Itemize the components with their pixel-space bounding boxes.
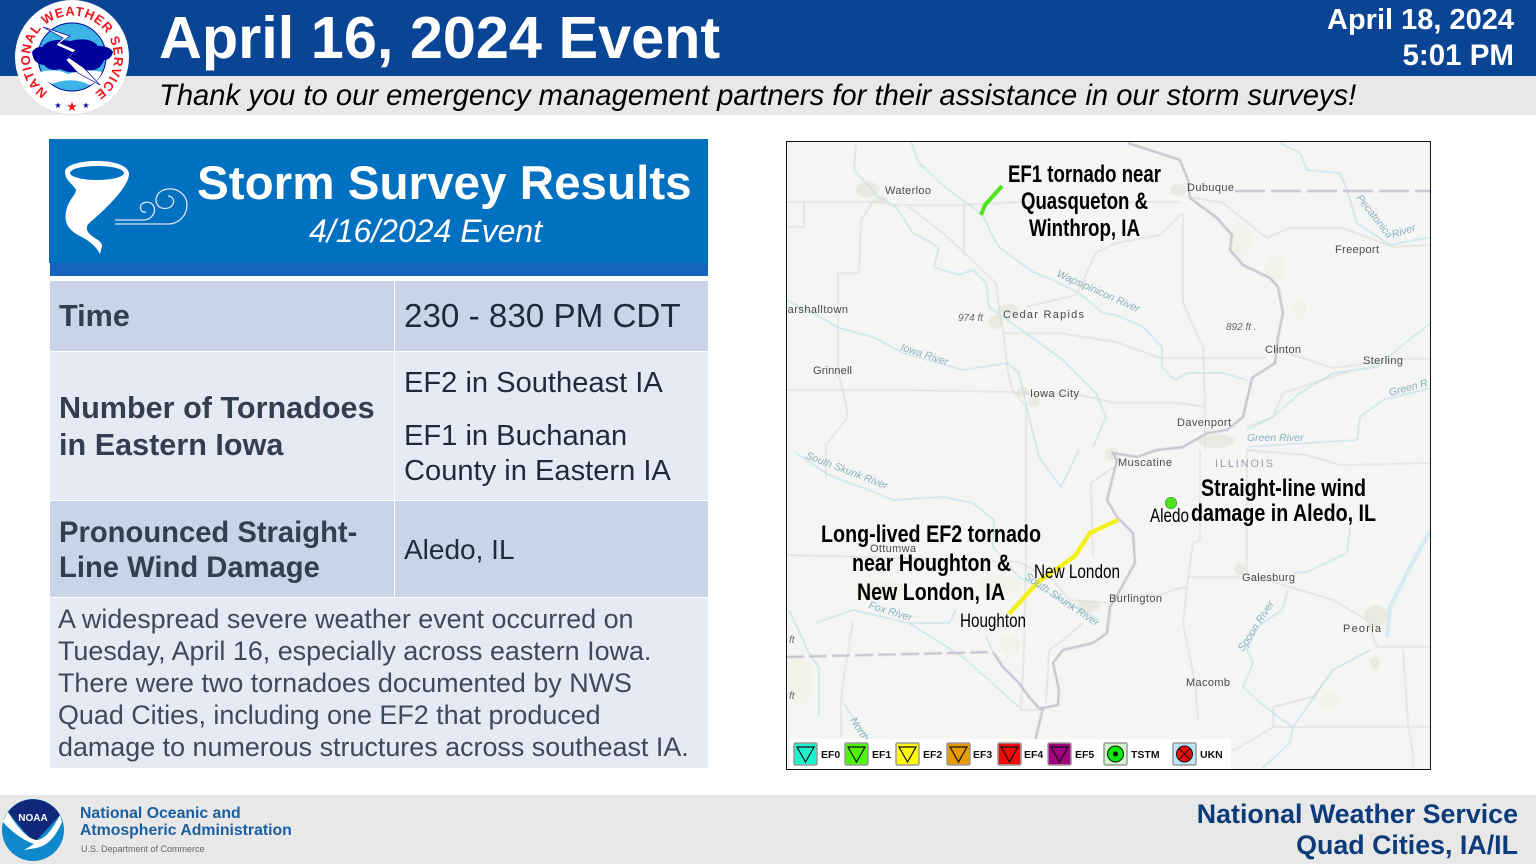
city labels: Macomb [1186,677,1230,689]
subtitle: Thank you to our emergency management partners for their assistance in our storm surveys! [159,80,1356,112]
river labels: Wapsipinicon River [1055,268,1142,315]
title: April 16, 2024 Event [159,4,720,71]
river labels: Green River [1247,432,1304,444]
date and time: April 18, 2024 [1327,4,1514,36]
callout: EF2 tornado [821,521,1041,606]
icon: National Weather Service logo: ★ [66,99,78,114]
place labels: Aledo [1150,506,1189,527]
row: straight-line wind value: Aledo, IL [404,534,515,565]
city labels [778,182,1403,702]
river labels: North [847,715,871,744]
marker: Aledo wind damage [1165,497,1177,509]
subtitle band [0,76,1536,115]
footer office name: Quad Cities, IA/IL [1296,830,1518,860]
place labels: Houghton [960,611,1026,632]
row: number of tornadoes label: in Eastern Iowa [59,428,283,462]
accent strip [50,263,708,276]
heading: storm survey results: Storm Survey Results [197,157,692,210]
legend: TSTM [1131,749,1160,761]
row: number of tornadoes value: County in Eastern IA [404,455,671,487]
city labels: 974 ft [958,313,984,324]
callout: EF2 tornado: New London, IA [857,579,1005,606]
icon: tornado and wind [65,161,188,254]
legend: EF3 [973,749,992,761]
row: time label [50,281,394,351]
footer office name: National Weather Service [1197,799,1518,829]
row: time value: 230 - 830 PM CDT [404,298,681,335]
city labels: Cedar Rapids [1003,309,1084,321]
description text: damage to numerous structures across southeast IA. [58,732,689,762]
city labels: Iowa City [1030,388,1080,400]
city labels: Muscatine [1118,457,1172,469]
row: number of tornadoes label: Number of Tornadoes [59,391,375,425]
city labels: Dubuque [1187,182,1234,194]
river labels: River [1390,222,1418,241]
city labels: Grinnell [813,365,852,377]
callout: Aledo wind damage [1191,475,1376,527]
row: straight-line wind value [395,501,708,597]
city labels: ILLINOIS [1215,458,1273,470]
callout: EF1 tornado: Quasqueton & [1021,188,1148,215]
river labels: Green R [1388,377,1430,399]
callout: Aledo wind damage: Straight-line wind [1201,475,1366,502]
city labels: Peoria [1343,623,1382,635]
panel: storm survey header [49,139,708,276]
city labels: Sterling [1363,355,1403,367]
track: EF1 tornado [981,186,1002,215]
river labels: South Skunk River [804,450,890,492]
city labels: Clinton [1265,344,1301,356]
city labels: Waterloo [885,185,931,197]
place labels: New London [1034,562,1120,583]
city labels: Ottumwa [870,543,917,555]
legend: UKN [1200,749,1223,761]
row: number of tornadoes value [395,352,708,500]
date and time: 5:01 PM [1402,39,1514,72]
row: number of tornadoes value: EF2 in Southeast IA [404,367,663,399]
city labels: 892 ft . [1226,322,1257,333]
callout: EF1 tornado [1008,161,1161,242]
legend [790,739,1231,769]
icon: NOAA logo: NOAA [18,813,48,824]
NOAA wordmark [80,805,292,839]
description text: Quad Cities, including one EF2 that produced [58,700,601,730]
row: straight-line wind label [50,501,394,597]
subheading: event date: 4/16/2024 Event [309,213,542,249]
callout: EF2 tornado: near Houghton & [852,550,1011,577]
description text: Tuesday, April 16, especially across eastern Iowa. [58,636,651,666]
legend: EF2 [923,749,942,761]
icon: National Weather Service logo: ★ [82,101,90,110]
NOAA wordmark: Atmospheric Administration [80,822,292,839]
legend: EF4 [1024,749,1043,761]
city labels: ft [789,691,796,702]
river labels: South Skunk River [1022,571,1102,629]
legend: EF1 [872,749,891,761]
icon: NOAA logo [2,799,64,861]
city labels: Burlington [1109,593,1162,605]
row: number of tornadoes label [50,352,394,500]
row: time label: Time [59,299,130,333]
callout: EF1 tornado: Winthrop, IA [1029,215,1140,242]
row: straight-line wind label: Pronounced Straight- [59,517,357,549]
river labels [804,192,1430,744]
U.S. Department of Commerce: U.S. Department of Commerce [81,844,205,854]
callout: EF2 tornado: Long-lived EF2 tornado [821,521,1041,548]
river labels: Fox River [867,599,914,624]
city labels: Galesburg [1242,572,1295,584]
track: EF2 tornado [1009,520,1118,614]
river labels: Iowa River [899,341,950,368]
city labels: Freeport [1335,244,1379,256]
description text: A widespread severe weather event occurred on [58,604,634,634]
header fill [49,139,708,263]
header band [0,0,1536,76]
callout: EF1 tornado: EF1 tornado near [1008,161,1161,188]
city labels: ft [789,635,796,646]
footer office name [1197,799,1518,860]
river labels: Pecatonica [1354,192,1395,241]
map [786,141,1431,770]
legend: EF0 [821,749,840,761]
footer band [0,795,1536,864]
river labels: Spoon River [1235,598,1277,654]
callout: Aledo wind damage: damage in Aledo, IL [1191,500,1376,527]
row: time value [395,281,708,351]
icon: National Weather Service logo: NATIONAL WEATHER SERVICE [21,6,124,100]
description text: There were two tornadoes documented by NWS [58,668,632,698]
date and time [1327,4,1514,72]
place labels [960,506,1189,632]
row: straight-line wind label: Line Wind Damage [59,552,320,584]
NOAA wordmark: National Oceanic and [80,805,241,822]
table: survey results [50,281,708,768]
legend: EF5 [1075,749,1094,761]
icon: National Weather Service logo: ★ [54,101,62,110]
row: number of tornadoes value: EF1 in Buchanan [404,420,627,452]
city labels: Davenport [1177,417,1231,429]
description text [50,598,708,768]
